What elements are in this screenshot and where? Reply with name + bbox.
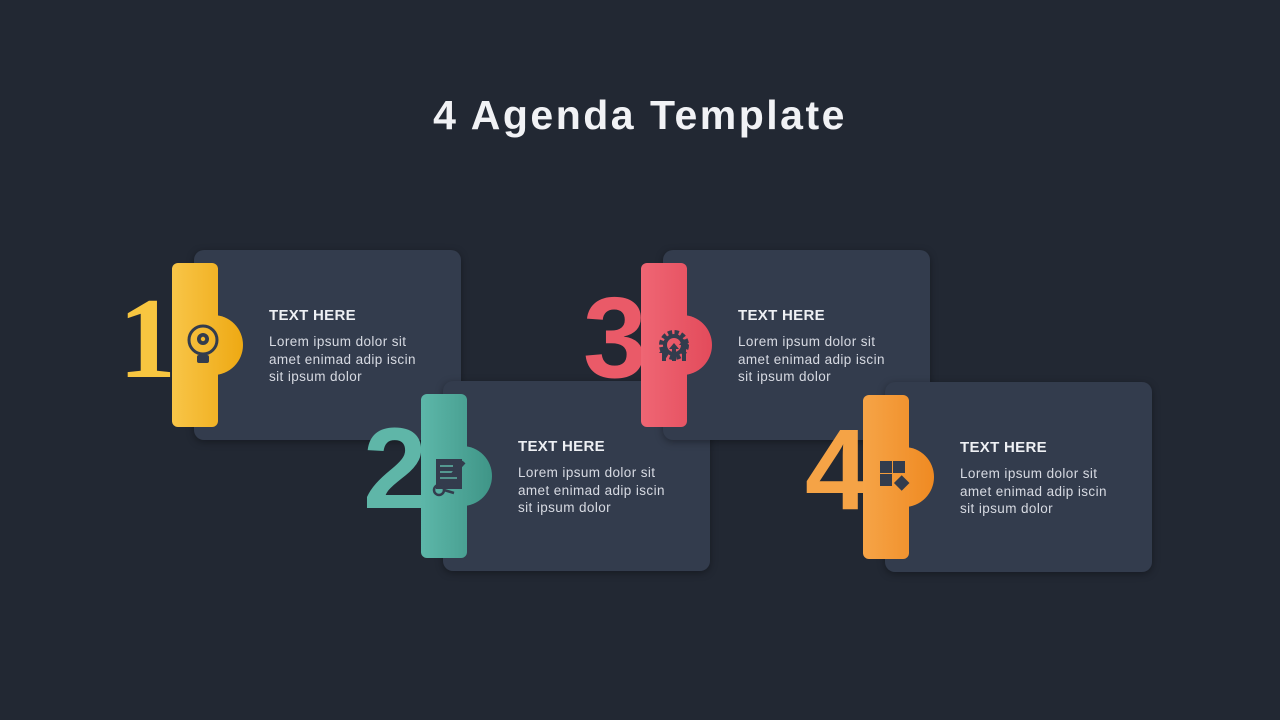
bar 4 with icon — [863, 395, 934, 559]
item 3 — [583, 250, 930, 444]
bar 1 with icon — [172, 263, 243, 427]
text 3: TEXT HERE — [738, 307, 825, 324]
item 2: Lorem ipsum dolor sit — [518, 465, 655, 480]
text 2: TEXT HERE — [518, 438, 605, 455]
card 1 — [194, 250, 461, 440]
item 4 — [805, 382, 1152, 574]
card 3 — [663, 250, 930, 440]
item 1 — [118, 250, 462, 442]
item 1: sit ipsum dolor — [269, 369, 362, 384]
bar 2 with icon — [421, 394, 492, 558]
item 4: Lorem ipsum dolor sit — [960, 466, 1097, 481]
item 1: amet enimad adip iscin — [269, 352, 416, 366]
item 2 — [363, 381, 710, 574]
item 3: sit ipsum dolor — [738, 369, 831, 384]
number 2: 2 — [363, 405, 427, 533]
item 4: amet enimad adip iscin — [960, 484, 1107, 498]
number 4: 4 — [805, 406, 869, 534]
text 4: TEXT HERE — [960, 439, 1047, 456]
title: 4 Agenda Template — [433, 92, 847, 138]
item 1: Lorem ipsum dolor sit — [269, 334, 406, 349]
item 3: Lorem ipsum dolor sit — [738, 334, 875, 349]
item 4: sit ipsum dolor — [960, 501, 1053, 516]
card 4 — [885, 382, 1152, 572]
number 3: 3 — [583, 274, 647, 402]
item 2: sit ipsum dolor — [518, 500, 611, 515]
number 1: 1 — [118, 275, 176, 402]
item 3: amet enimad adip iscin — [738, 352, 885, 366]
card 2 — [443, 381, 710, 571]
text 1: TEXT HERE — [269, 307, 356, 324]
item 2: amet enimad adip iscin — [518, 482, 665, 498]
bar 3 with icon — [641, 263, 712, 427]
